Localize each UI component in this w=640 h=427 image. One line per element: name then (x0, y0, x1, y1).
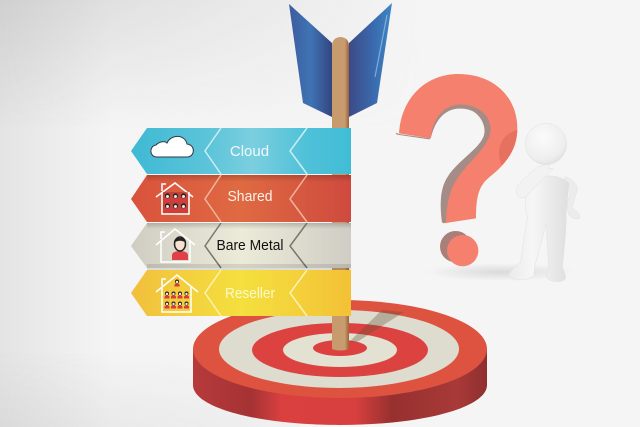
icon: house with residents (156, 183, 193, 214)
right fletching (349, 3, 392, 117)
right arm on hip (563, 177, 580, 219)
head (525, 123, 567, 165)
shaft (332, 37, 349, 350)
label: Cloud: Cloud (230, 143, 269, 160)
signpost: Shared (131, 175, 351, 222)
icon: cloud (151, 136, 193, 157)
fletching highlight (375, 15, 387, 77)
icon: house with one person (156, 229, 195, 262)
question mark highlight (499, 130, 517, 165)
arrow (289, 3, 392, 350)
icon: house with many residents (156, 275, 198, 312)
target (193, 300, 487, 425)
background (0, 0, 290, 427)
arrow shadow on target (349, 310, 404, 342)
left fletching (289, 4, 332, 117)
label: Bare Metal: Bare Metal (216, 237, 284, 254)
signpost: Cloud (131, 128, 351, 174)
question mark face (399, 74, 517, 223)
label: Shared: Shared (228, 188, 272, 205)
question mark (396, 74, 517, 266)
question mark depth (396, 105, 491, 223)
left arm to chin (517, 163, 553, 198)
signpost: Bare Metal (131, 223, 351, 268)
floor shadow (425, 263, 575, 281)
thinking figure (509, 123, 580, 282)
label: Reseller: Reseller (225, 285, 275, 302)
signpost: Reseller (131, 264, 351, 316)
question mark dot (440, 231, 478, 266)
torso and legs (509, 176, 569, 282)
